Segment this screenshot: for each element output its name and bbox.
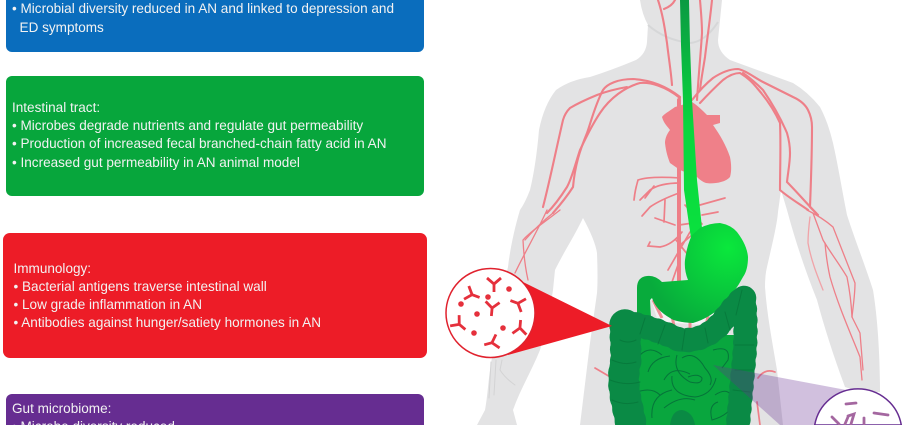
faint arm vessels below callout (489, 360, 515, 398)
text: immunology list (14, 261, 321, 330)
intestine folds (630, 349, 734, 420)
small intestine (622, 335, 745, 425)
purple circle callout: microbes (815, 389, 901, 425)
antibodies (450, 278, 528, 352)
antigen dots (458, 286, 512, 336)
callout cone: purple (713, 365, 858, 425)
panel: intestinal tract, green (6, 76, 424, 196)
callout cone: red (508, 282, 612, 355)
text: intestinal tract list: • Microbes degrade nutrients and regulate gut permeability (12, 118, 363, 133)
neck and arch arteries (543, 0, 818, 215)
text: gut microbiome list (12, 401, 175, 425)
text: intestinal tract list: • Increased gut permeability in AN animal model (12, 155, 300, 170)
text: gut microbiome list: Gut microbiome: (12, 401, 111, 416)
red circle callout: antibodies (446, 268, 535, 358)
panel: gut microbiome, purple (6, 394, 424, 425)
panel: brain and gut, blue (6, 0, 424, 52)
panel: immunology, red (3, 233, 427, 358)
text: intestinal tract list (12, 100, 386, 170)
human body silhouette (477, 0, 880, 425)
colon scalloped edges (625, 298, 743, 340)
arteries (489, 0, 863, 425)
heart (662, 102, 731, 183)
large intestine (610, 290, 754, 424)
colon haustra (610, 290, 754, 404)
text: immunology list: • Bacterial antigens traverse intestinal wall (14, 279, 267, 294)
collar line (648, 22, 718, 43)
lower arm arteries (515, 210, 863, 380)
white gap below stomach (650, 295, 735, 326)
text: microbial diversity: • Microbial diversity reduced in AN and linked to depression and (12, 1, 394, 16)
text: microbial diversity (12, 1, 394, 35)
text: immunology list: • Antibodies against hunger/satiety hormones in AN (14, 315, 321, 330)
text: immunology list: Immunology: (14, 261, 91, 276)
text: microbial diversity: ED symptoms (20, 20, 104, 34)
text: immunology list: • Low grade inflammation in AN (14, 297, 202, 312)
central aorta and branches (677, 100, 681, 300)
text: intestinal tract list: Intestinal tract: (12, 100, 100, 115)
microbes (832, 403, 888, 424)
stomach and duodenum (637, 223, 748, 323)
text: intestinal tract list: • Production of increased fecal branched-chain fatty acid in AN (12, 136, 386, 151)
esophagus (680, 0, 702, 245)
intestine dark patch (670, 410, 695, 425)
